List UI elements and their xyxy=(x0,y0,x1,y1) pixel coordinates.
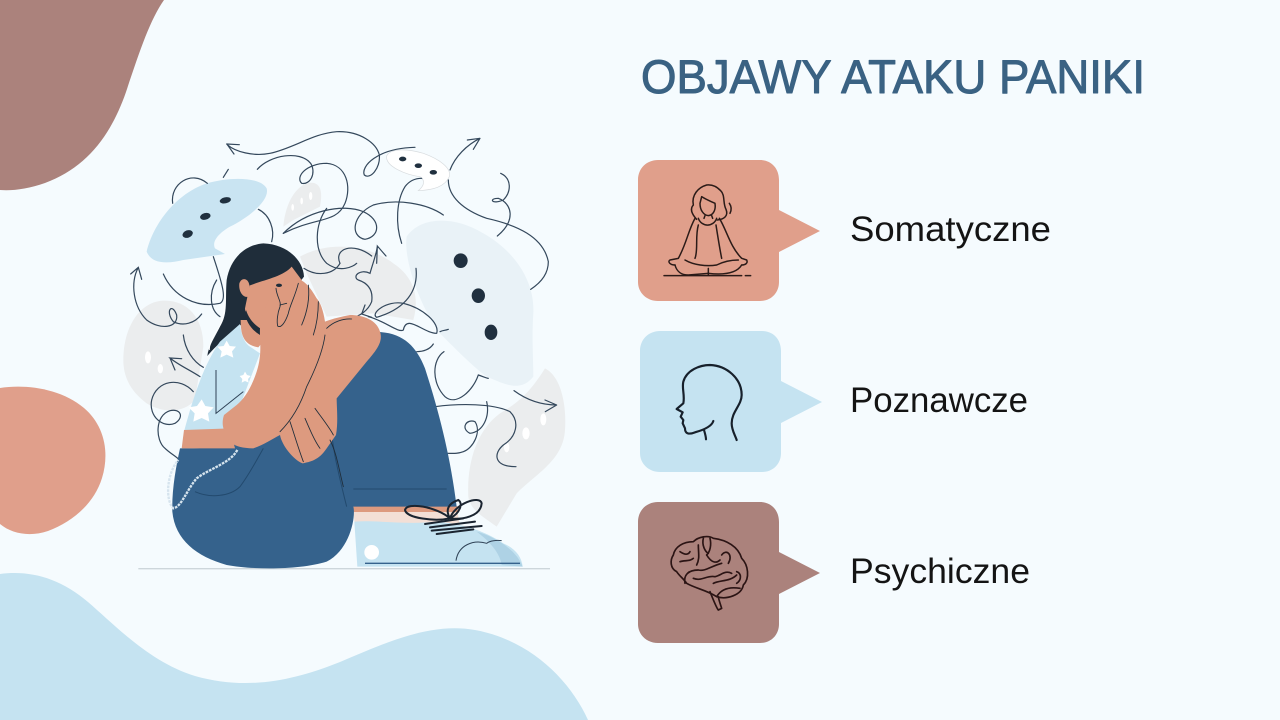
tangled thought lines and arrows xyxy=(131,132,557,467)
speech bubble: small white xyxy=(387,150,450,191)
shoe laces xyxy=(405,500,482,534)
label: Poznawcze xyxy=(850,381,1028,420)
shoe xyxy=(353,506,523,567)
speech bubble: blue left xyxy=(147,179,267,262)
hair back xyxy=(207,243,304,356)
blob: top-left brown xyxy=(0,0,164,190)
icon: meditating woman xyxy=(664,185,751,276)
ground line xyxy=(138,567,550,571)
label: Somatyczne xyxy=(850,210,1051,249)
label: Psychiczne xyxy=(850,552,1030,591)
blob: bottom-left blue xyxy=(0,573,588,720)
ear xyxy=(239,279,249,297)
chin shadow xyxy=(245,310,261,335)
jeans details xyxy=(195,403,447,507)
grey cloud highlights xyxy=(145,192,546,452)
eye mark xyxy=(276,284,282,287)
grey smoke clouds xyxy=(123,183,565,527)
shirt crease xyxy=(216,370,243,413)
card: cognitive xyxy=(640,331,1028,472)
neck xyxy=(241,320,270,347)
card: somatic xyxy=(638,160,1051,301)
blob: left salmon xyxy=(0,387,105,534)
card: psychological xyxy=(638,502,1030,643)
jeans xyxy=(172,332,457,568)
icon: head profile xyxy=(677,365,742,440)
speech bubble: pale large xyxy=(406,221,533,386)
title: OBJAWY ATAKU PANIKI xyxy=(641,50,1145,103)
shirt stars xyxy=(189,341,251,422)
waist skin xyxy=(182,428,235,448)
icon: brain xyxy=(671,537,748,610)
hair strand xyxy=(209,280,225,350)
arms and hand xyxy=(223,280,381,463)
skin fold lines xyxy=(276,283,352,487)
face xyxy=(245,267,307,333)
shirt xyxy=(184,324,260,432)
chain xyxy=(168,450,237,508)
illustration: woman with racing thoughts xyxy=(123,132,565,569)
